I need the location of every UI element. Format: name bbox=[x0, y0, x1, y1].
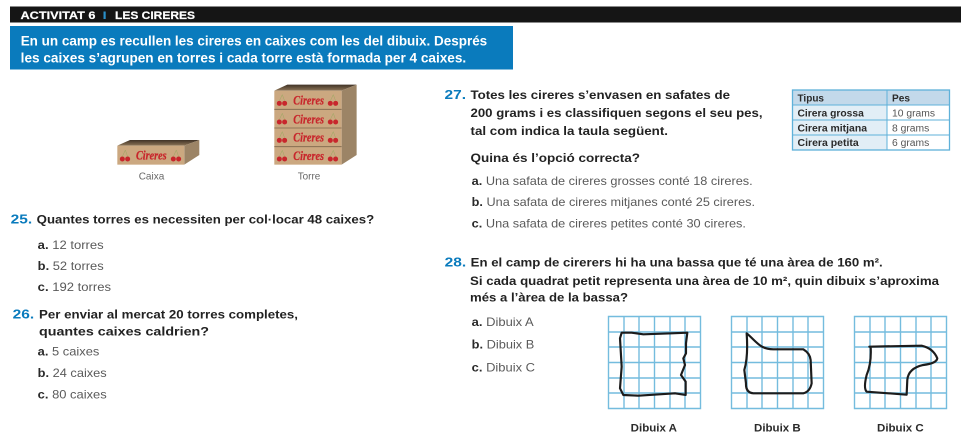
question 25: a. 12 torres bbox=[38, 238, 104, 252]
grid: Dibuix A bbox=[608, 316, 700, 408]
question 27: tal com indica la taula següent. bbox=[470, 124, 668, 138]
question 27: 27. bbox=[444, 87, 466, 102]
question 27: b. Una safata de cireres mitjanes conté 25 cireres. bbox=[472, 195, 755, 209]
question 27: c. Una safata de cireres petites conté 30 cireres. bbox=[472, 216, 746, 230]
grid: Dibuix C bbox=[854, 316, 946, 408]
question 26: b. 24 caixes bbox=[38, 366, 107, 380]
question 26: quantes caixes caldrien? bbox=[39, 325, 209, 339]
question 26: c. 80 caixes bbox=[38, 388, 107, 402]
intro text box bbox=[10, 26, 513, 70]
question 26 bbox=[13, 306, 298, 402]
question 25 bbox=[11, 211, 374, 294]
question 27 bbox=[444, 87, 762, 230]
question 26: Per enviar al mercat 20 torres completes, bbox=[39, 307, 298, 321]
question 27: Totes les cireres s’envasen en safates de bbox=[470, 88, 730, 102]
table: cherry weights: Cirera mitjana bbox=[798, 123, 867, 134]
question 27: 200 grams i es classifiquen segons el seu pes, bbox=[470, 106, 762, 120]
question 25: b. 52 torres bbox=[38, 259, 104, 273]
header bar: ACTIVITAT 6 bbox=[20, 10, 96, 22]
illustration: tower of crates: Cireres bbox=[293, 111, 324, 126]
captions under grids bbox=[631, 423, 924, 435]
question 25: Quantes torres es necessiten per col·locar 48 caixes? bbox=[37, 212, 374, 226]
table: cherry weights: Cirera petita bbox=[798, 138, 859, 149]
question 28: b. Dibuix B bbox=[472, 337, 534, 351]
question 28: c. Dibuix C bbox=[472, 361, 535, 375]
intro text box: les caixes s’agrupen en torres i cada torre està formada per 4 caixes. bbox=[21, 50, 466, 65]
table: cherry weights: Cirera grossa bbox=[798, 108, 864, 119]
table: cherry weights: 10 grams bbox=[892, 108, 935, 119]
illustration: tower of crates bbox=[274, 85, 357, 165]
question 28: més a l’àrea de la bassa? bbox=[470, 291, 628, 305]
captions under grids: Dibuix C bbox=[877, 423, 924, 435]
question 28 bbox=[445, 255, 939, 375]
question 27: Quina és l’opció correcta? bbox=[470, 151, 640, 165]
captions under grids: Dibuix B bbox=[754, 423, 801, 435]
caption: Caixa: Caixa bbox=[139, 170, 164, 182]
question 28: a. Dibuix A bbox=[472, 315, 534, 329]
captions under grids: Dibuix A bbox=[631, 423, 677, 435]
question 28: 28. bbox=[445, 255, 466, 270]
illustration: tower of crates: Cireres bbox=[293, 130, 324, 145]
table: cherry weights: Pes bbox=[892, 93, 910, 104]
illustration: single crate: Cireres bbox=[136, 148, 167, 163]
question 28: Si cada quadrat petit representa una àrea de 10 m², quin dibuix s’aproxima bbox=[470, 274, 939, 288]
question 25: 25. bbox=[11, 211, 32, 226]
illustration: single crate bbox=[117, 140, 199, 165]
question 25: c. 192 torres bbox=[38, 280, 111, 294]
header bar: LES CIRERES bbox=[115, 10, 195, 22]
question 27: a. Una safata de cireres grosses conté 18 cireres. bbox=[472, 174, 753, 188]
intro text box: En un camp es recullen les cireres en caixes com les del dibuix. Després bbox=[21, 34, 487, 49]
caption: Torre: Torre bbox=[298, 170, 320, 182]
illustration: tower of crates: Cireres bbox=[293, 148, 324, 163]
table: cherry weights: 8 grams bbox=[892, 123, 929, 134]
question 28: En el camp de cirerers hi ha una bassa que té una àrea de 160 m². bbox=[471, 256, 883, 270]
question 26: a. 5 caixes bbox=[38, 345, 99, 359]
question 26: 26. bbox=[13, 306, 34, 321]
header bar bbox=[10, 6, 961, 22]
illustration: tower of crates: Cireres bbox=[293, 93, 324, 108]
table: cherry weights bbox=[792, 90, 950, 150]
table: cherry weights: 6 grams bbox=[892, 138, 929, 149]
table: cherry weights: Tipus bbox=[798, 93, 824, 104]
grid: Dibuix B bbox=[732, 316, 824, 408]
